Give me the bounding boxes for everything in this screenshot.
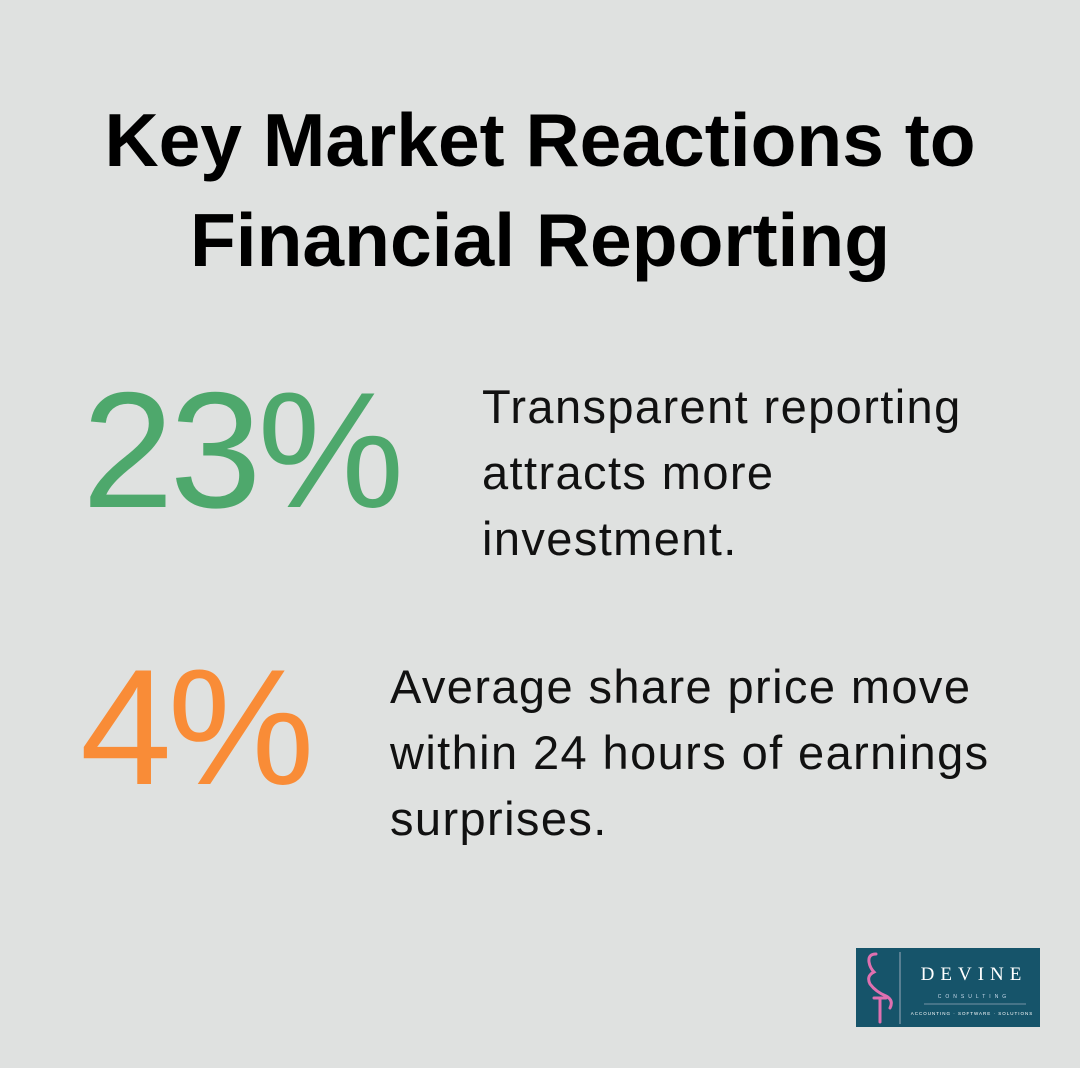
- icon: flamingo: [869, 954, 891, 1022]
- text: 23% description: attracts more: [482, 446, 774, 499]
- text: 4% description: within 24 hours of earnings: [390, 726, 990, 779]
- stat: 4%: 4%: [80, 635, 310, 819]
- logo: Devine Consulting: DEVINE: [921, 964, 1027, 985]
- stat: 23%: 23%: [82, 358, 400, 542]
- title: [104, 98, 976, 282]
- logo: Devine Consulting: CONSULTING: [938, 994, 1010, 1000]
- logo: Devine Consulting: [856, 948, 1040, 1027]
- title: Financial Reporting: [190, 198, 890, 282]
- text: 4% description: surprises.: [390, 792, 608, 845]
- text: 23% description: [482, 380, 962, 565]
- logo: Devine Consulting: ACCOUNTING · SOFTWARE · SOLUTIONS: [911, 1011, 1033, 1016]
- text: 23% description: Transparent reporting: [482, 380, 962, 433]
- text: 4% description: Average share price move: [390, 660, 971, 713]
- text: 4% description: [390, 660, 990, 845]
- title: Key Market Reactions to: [104, 98, 976, 182]
- text: 23% description: investment.: [482, 512, 738, 565]
